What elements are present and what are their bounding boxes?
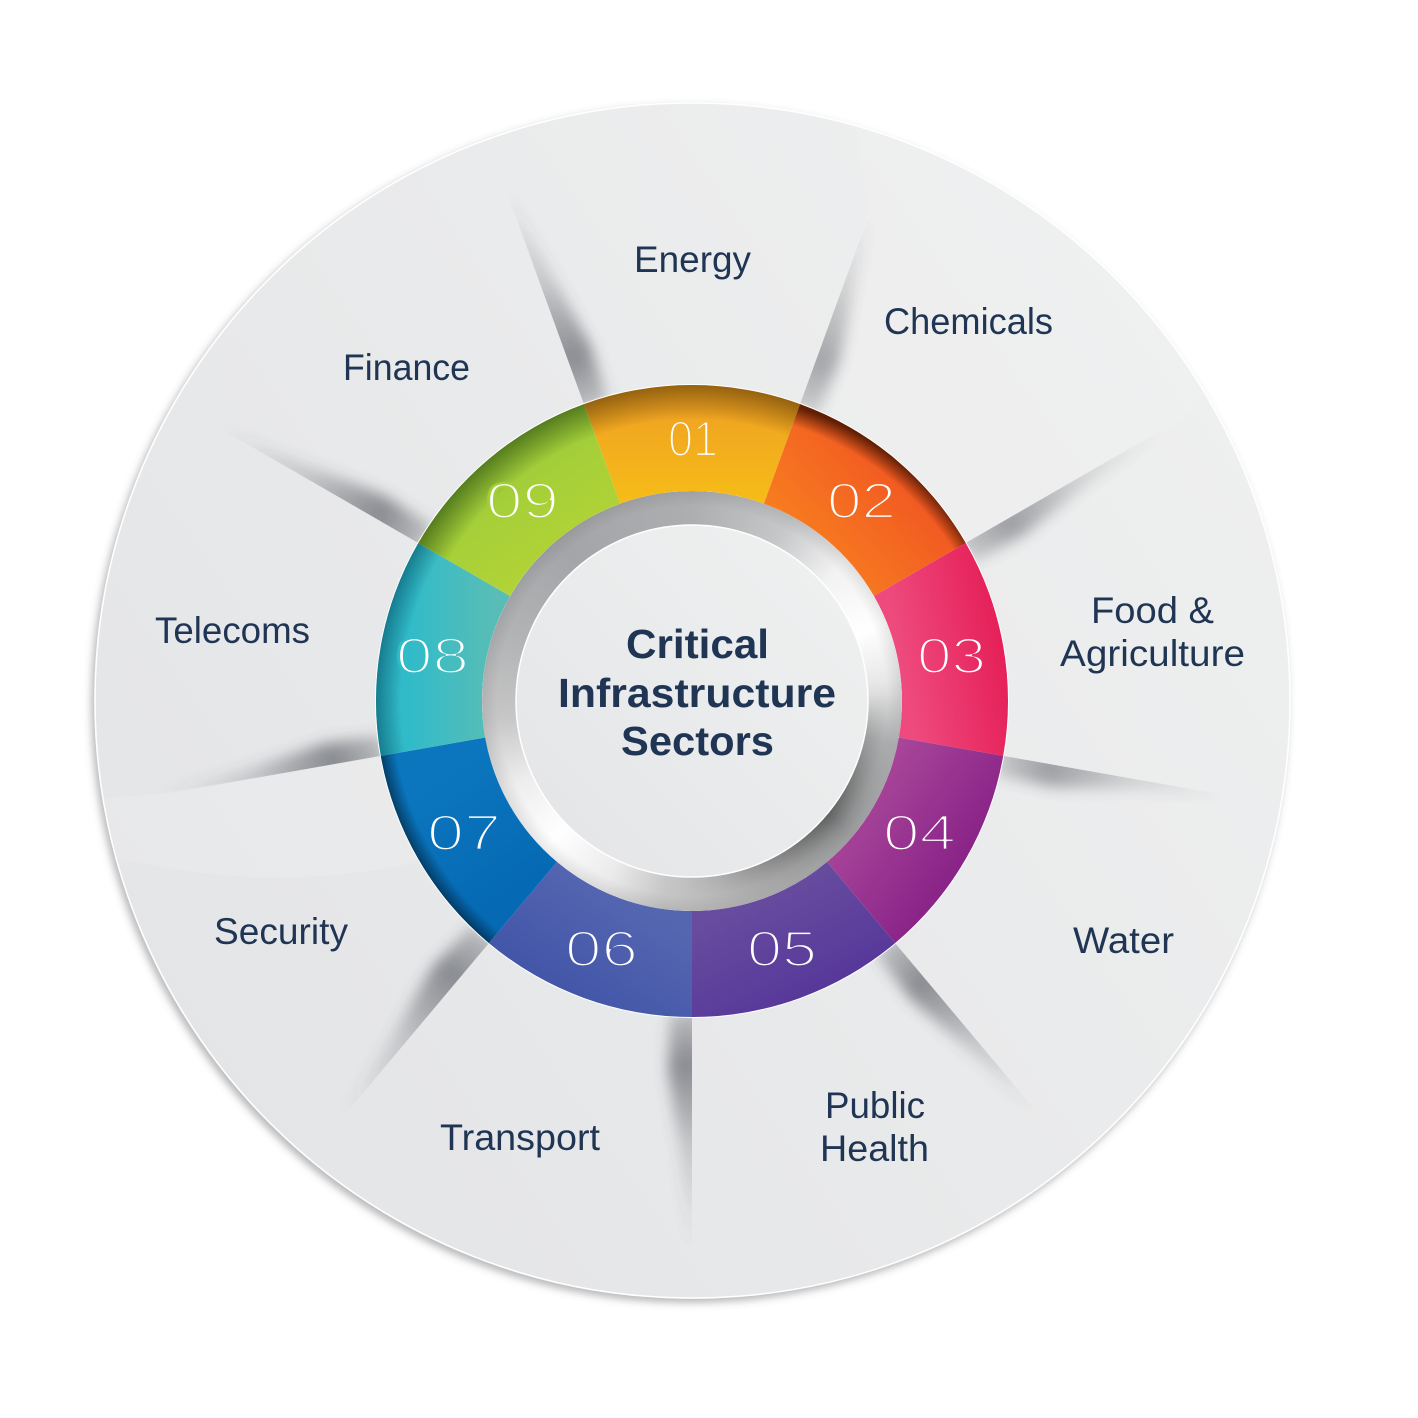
main infographic wheel: [86, 102, 1292, 1308]
label: Energy: Energy: [634, 239, 751, 280]
number 03: 03: [917, 628, 986, 684]
number 08: 08: [396, 628, 469, 684]
label: Water: Water: [1073, 920, 1174, 961]
label: Food & Agriculture: [1060, 590, 1245, 674]
label: Chemicals: Chemicals: [884, 301, 1053, 342]
segment 06: [489, 862, 692, 1017]
segment 08: [376, 543, 510, 756]
label: Food & Agriculture: Food &: [1091, 590, 1214, 631]
paper fold shadows between sector panels: [197, 224, 1186, 1208]
hub circle: [516, 525, 868, 877]
label: Transport: Transport: [440, 1117, 601, 1158]
metallic bevel ring around hub: [482, 491, 902, 911]
number 05: 05: [747, 921, 817, 977]
label: Public Health: Public: [825, 1085, 925, 1126]
segment 03: [874, 543, 1008, 756]
number 02: 02: [827, 473, 896, 529]
label: Public Health: [820, 1085, 929, 1169]
number 01: 01: [668, 411, 718, 467]
background disc: [95, 103, 1290, 1298]
label: Security: Security: [214, 911, 349, 952]
label: Public Health: Health: [820, 1128, 929, 1169]
segment 02: [764, 404, 966, 596]
number 04: 04: [883, 805, 956, 861]
sector labels: [155, 239, 1245, 1169]
lighter paper panels: [1017, 513, 1018, 514]
number 09: 09: [486, 473, 559, 529]
segment 04: [827, 738, 1003, 943]
hub title: [558, 621, 836, 764]
number 06: 06: [565, 921, 638, 977]
segment 09: [418, 404, 620, 596]
colour ring segments: [376, 385, 1008, 1017]
label: Food & Agriculture: Agriculture: [1060, 633, 1245, 674]
ring numbers: [396, 411, 986, 977]
hub title: Critical: [626, 621, 769, 667]
segment 05: [692, 862, 895, 1017]
hub title: Sectors: [621, 718, 774, 764]
segment 01: [584, 385, 800, 504]
hub title: Infrastructure: [558, 670, 836, 716]
label: Finance: Finance: [343, 347, 470, 388]
segment 07: [381, 738, 557, 943]
number 07: 07: [427, 805, 501, 861]
white ring outline: [375, 384, 1009, 1018]
label: Telecoms: Telecoms: [155, 610, 310, 651]
